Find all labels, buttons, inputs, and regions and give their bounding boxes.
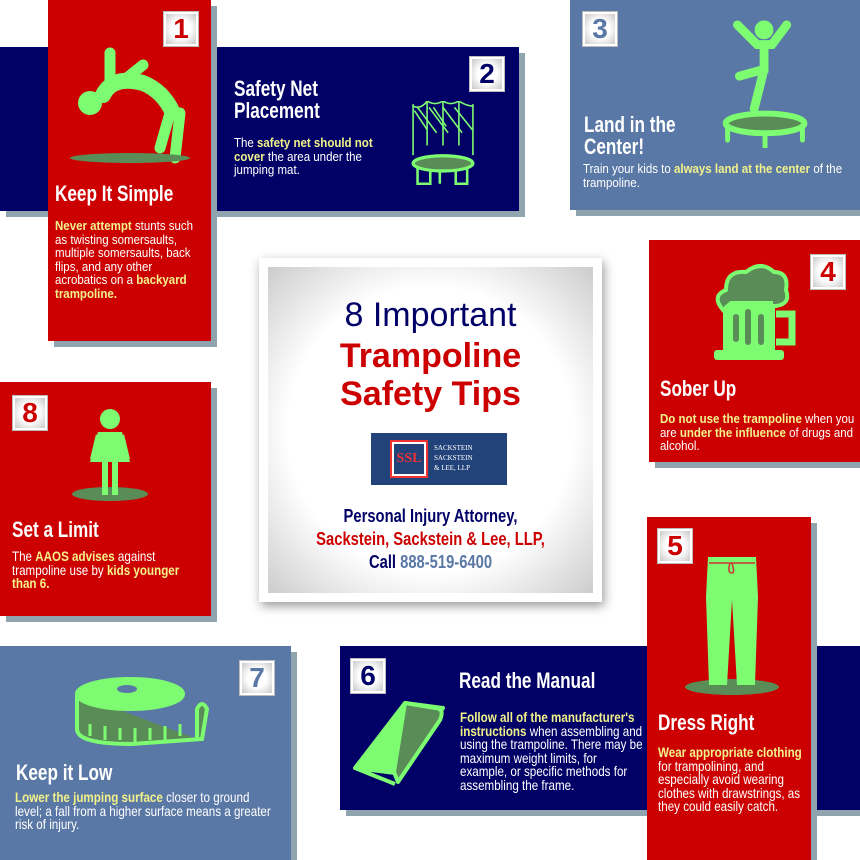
heading 3 (584, 112, 676, 159)
contact text: Personal Injury Attorney, (344, 506, 517, 526)
heading 2 (234, 76, 320, 123)
logo: SSL (397, 451, 421, 466)
logo: & LEE, LLP (434, 464, 470, 472)
heading 7: Keep it Low (16, 760, 112, 785)
panel 1: keep it simple (48, 0, 211, 341)
number 8: 8 (22, 397, 38, 428)
heading 2: Safety Net (234, 76, 318, 101)
title red (340, 337, 521, 413)
heading 8: Set a Limit (12, 517, 99, 542)
icon: child figure (72, 409, 148, 501)
number 1: 1 (173, 13, 189, 44)
number 4 (811, 255, 845, 289)
logo (371, 433, 507, 485)
text 4: Do not use the trampoline when you are under the influence of drugs and alcohol. (660, 412, 854, 453)
icon: trampoline with net (412, 101, 474, 185)
number 6: 6 (360, 660, 376, 691)
icon: book (353, 701, 445, 786)
heading 4: Sober Up (660, 376, 736, 401)
number 7 (240, 661, 274, 695)
number 2: 2 (479, 58, 495, 89)
number 6 (351, 659, 385, 693)
heading 2: Placement (234, 98, 320, 123)
title red: Trampoline (340, 337, 521, 375)
number 5 (658, 529, 692, 563)
logo: SACKSTEIN (434, 454, 473, 462)
heading 1: Keep It Simple (55, 181, 173, 206)
title: 8 Important (344, 296, 516, 334)
contact text: Sackstein, Sackstein & Lee, LLP, (316, 529, 545, 549)
panel 2: safety net placement (0, 47, 519, 211)
number 7: 7 (249, 662, 265, 693)
text 7: Lower the jumping surface closer to ground level; a fall from a higher surface means a greater risk of injury. (15, 789, 271, 832)
contact text (316, 506, 545, 572)
text 3: Train your kids to always land at the center of the trampoline. (583, 162, 842, 190)
panel 5: dress right (647, 517, 811, 860)
panel 3: land in the center (570, 0, 860, 210)
heading 3: Center! (584, 134, 644, 159)
icon: pants (685, 557, 779, 695)
text 8: The AAOS advises against trampoline use by kids younger than 6. (12, 548, 179, 591)
text 1: Never attempt stunts such as twisting somersaults, multiple somersaults, back flips, and any other acrobatics on a backyard trampoline. (55, 219, 193, 300)
heading 6: Read the Manual (459, 668, 595, 693)
panel 7: keep it low (0, 646, 291, 860)
heading 3: Land in the (584, 112, 676, 137)
icon: tape measure (75, 677, 210, 746)
number 4: 4 (820, 256, 836, 287)
text 2: The safety net should not cover the area under the jumping mat. (234, 136, 373, 177)
heading 5: Dress Right (658, 710, 754, 735)
number 2 (470, 57, 504, 91)
panel 8: set a limit (0, 382, 211, 616)
panel 4: sober up (649, 240, 860, 462)
icon: jumper on trampoline (722, 20, 808, 148)
number 1 (164, 12, 198, 46)
text 5: Wear appropriate clothing for trampolining, and especially avoid wearing clothes with drawstrings, as they could easily catch. (658, 744, 802, 814)
text 6: Follow all of the manufacturer's instructions when assembling and using the trampoline. There may be maximum weight limits, for example, or specific methods for assembling the frame. (460, 709, 643, 792)
panel 6: read the manual (340, 646, 860, 810)
number 3: 3 (592, 13, 608, 44)
logo: SACKSTEIN (434, 444, 473, 452)
contact text: Call 888-519-6400 (369, 552, 492, 572)
title red: Safety Tips (340, 375, 521, 413)
number 5: 5 (667, 530, 683, 561)
icon: somersault figure (70, 48, 190, 164)
number 8 (13, 396, 47, 430)
icon: beer mug (714, 264, 796, 360)
center title box (259, 258, 602, 602)
number 3 (583, 12, 617, 46)
